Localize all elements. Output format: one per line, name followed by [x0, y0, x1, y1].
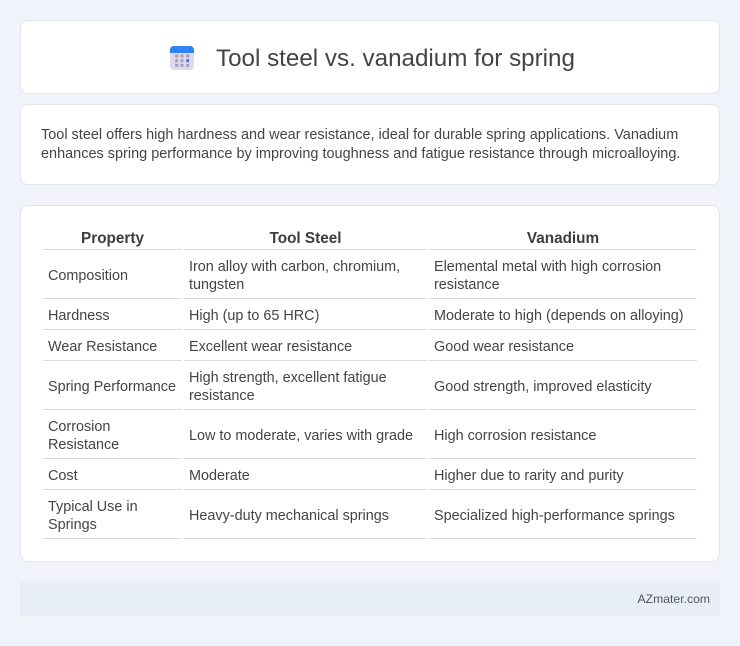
footer brand: AZmater.com — [638, 592, 710, 606]
comparison table: Good strength, improved elasticity — [434, 379, 652, 395]
row: corrosion resistance: Corrosion — [48, 419, 110, 435]
comparison table: Low to moderate, varies with grade — [189, 428, 413, 444]
comparison table: resistance — [434, 277, 500, 293]
comparison table: Excellent wear resistance — [189, 339, 352, 355]
comparison table: Good wear resistance — [434, 339, 574, 355]
comparison table: High (up to 65 HRC) — [189, 308, 319, 324]
title card — [20, 20, 720, 94]
comparison table: Iron alloy with carbon, chromium, — [189, 259, 400, 275]
footer — [20, 582, 720, 616]
row: typical use: Springs — [48, 517, 97, 533]
row: cost: Cost — [48, 468, 78, 484]
intro text — [41, 127, 680, 162]
row: hardness: Hardness — [48, 308, 110, 324]
intro text: enhances spring performance by improving toughness and fatigue resistance through microalloying. — [41, 146, 680, 162]
comparison table: Moderate — [189, 468, 250, 484]
comparison table: Heavy-duty mechanical springs — [189, 508, 389, 524]
row: typical use — [48, 499, 138, 533]
comparison table: Moderate to high (depends on alloying) — [434, 308, 684, 324]
comparison table — [43, 230, 697, 539]
row: typical use: Typical Use in — [48, 499, 138, 515]
table card — [20, 205, 720, 562]
intro text: Tool steel offers high hardness and wear resistance, ideal for durable spring applications. Vanadium — [41, 127, 678, 143]
header: tool steel: Tool Steel — [270, 230, 341, 247]
comparison table: High corrosion resistance — [434, 428, 596, 444]
row: spring performance: Spring Performance — [48, 379, 176, 395]
row: corrosion resistance: Resistance — [48, 437, 119, 453]
row: wear resistance: Wear Resistance — [48, 339, 157, 355]
comparison table: tungsten — [189, 277, 244, 293]
row: corrosion resistance — [48, 419, 119, 453]
comparison table: High strength, excellent fatigue — [189, 370, 387, 386]
intro card — [20, 104, 720, 185]
comparison table: Specialized high-performance springs — [434, 508, 675, 524]
title: Tool steel vs. vanadium for spring — [216, 45, 575, 72]
header: property: Property — [81, 230, 144, 247]
comparison table: Higher due to rarity and purity — [434, 468, 624, 484]
header: vanadium: Vanadium — [527, 230, 599, 247]
icon: calendar — [170, 46, 194, 70]
comparison table: resistance — [189, 388, 255, 404]
comparison table: Elemental metal with high corrosion — [434, 259, 661, 275]
row: composition: Composition — [48, 268, 128, 284]
